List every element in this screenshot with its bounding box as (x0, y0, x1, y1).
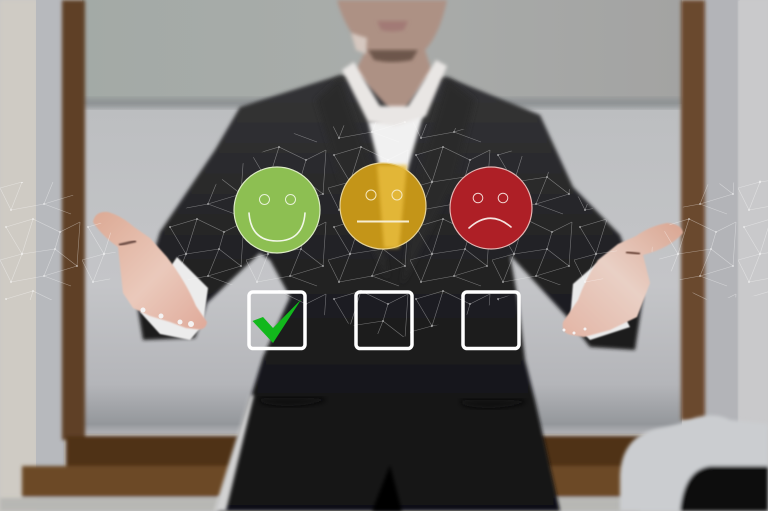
lapels (316, 78, 388, 280)
shirt cuffs (140, 257, 208, 340)
face and neck (337, 0, 447, 118)
checkbox: empty middle (356, 292, 412, 348)
icon: sad face (450, 167, 532, 249)
shirt (368, 112, 424, 240)
left hand (93, 212, 207, 329)
shirt collar (342, 60, 447, 126)
white object lower right (620, 415, 768, 511)
icon: green check mark (252, 299, 302, 343)
icon: neutral face (340, 163, 426, 249)
person (93, 0, 683, 511)
shirt edge strip (214, 395, 254, 511)
suit body and sleeves (138, 75, 643, 511)
icon: happy face (234, 167, 320, 253)
network overlay (0, 120, 768, 340)
pocket flaps (258, 398, 325, 406)
suit center opening (372, 465, 402, 511)
right hand (563, 223, 683, 337)
checkbox: empty right (463, 292, 519, 348)
checkbox: checked (249, 292, 305, 348)
